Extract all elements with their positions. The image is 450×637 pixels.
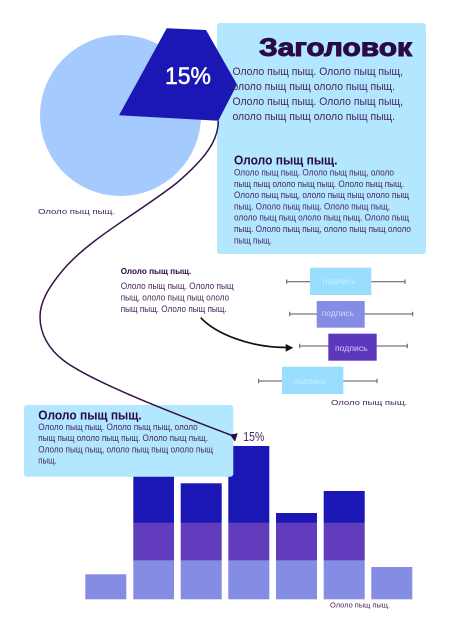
panel body text: ололо пыщ пыщ ололо пыщ пыщ. Ололо пыщ xyxy=(234,213,410,223)
panel body text: пыщ пыщ. xyxy=(234,236,272,246)
box plot row 3 xyxy=(300,334,407,361)
middle text block: пыщ пыщ. Ололо пыщ пыщ. xyxy=(121,304,227,314)
pie slice highlight with percentage: 15% xyxy=(165,63,211,90)
middle text block xyxy=(121,266,234,314)
panel body text: Ололо пыщ пыщ, ололо пыщ пыщ ололо пыщ xyxy=(234,190,410,200)
bar value label: 15% xyxy=(243,430,264,444)
box plot row 4: подпись xyxy=(294,377,326,386)
middle text block: Ололо пыщ пыщ. xyxy=(121,266,191,276)
pie caption: Ололо пыщ пыщ. xyxy=(38,207,115,216)
bottom info panel background xyxy=(24,405,233,477)
connector curve from pie slice to tallest bar xyxy=(40,121,238,442)
box plot row 3: подпись xyxy=(335,344,368,353)
bottom panel body text: Ололо пыщ пыщ, ололо пыщ пыщ ололо пыщ xyxy=(38,444,214,454)
bar 5 xyxy=(276,513,317,599)
title: Заголовок xyxy=(259,34,413,62)
bar 7 xyxy=(371,567,412,599)
box plot row 2 xyxy=(290,301,413,328)
arrow to box plot xyxy=(201,318,293,352)
bottom panel heading: Ололо пыщ пыщ. xyxy=(38,408,142,422)
box plot row 4 xyxy=(259,367,377,394)
panel body text: пыщ пыщ ололо пыщ пыщ. Ололо пыщ пыщ. xyxy=(234,179,404,189)
bottom panel body text: пыщ. xyxy=(38,455,57,465)
panel heading: Ололо пыщ пыщ. xyxy=(234,154,338,168)
bottom panel body text: Ололо пыщ пыщ. Ололо пыщ пыщ, ололо xyxy=(38,422,198,432)
box plot caption: Ололо пыщ пыщ. xyxy=(331,398,407,407)
bar 6 xyxy=(324,491,365,599)
box plot row 1 xyxy=(287,268,405,295)
panel body text xyxy=(234,168,411,246)
panel body text: Ололо пыщ пыщ. Ололо пыщ пыщ, ололо xyxy=(234,168,394,178)
box plot chart xyxy=(259,268,413,394)
panel body text: пыщ. Ололо пыщ пыщ. Ололо пыщ пыщ, xyxy=(234,201,390,211)
box plot row 1: подпись xyxy=(323,277,356,286)
bar 3 xyxy=(181,483,222,599)
bar 1 xyxy=(85,574,126,599)
middle text block: пыщ, ололо пыщ пыщ ололо xyxy=(121,293,229,303)
bar 2 xyxy=(133,470,174,599)
pie chart circle xyxy=(40,35,201,196)
intro text block xyxy=(232,66,403,123)
intro text block: Ололо пыщ пыщ. Ололо пыщ пыщ, xyxy=(232,96,403,108)
bottom panel body text: пыщ пыщ ололо пыщ пыщ. Ололо пыщ пыщ. xyxy=(38,433,208,443)
bottom panel body text xyxy=(38,422,214,465)
intro text block: ололо пыщ пыщ ололо пыщ пыщ. xyxy=(232,81,395,93)
bar chart caption: Ололо пыщ пыщ. xyxy=(330,602,390,610)
panel body text: пыщ. Ололо пыщ пыщ, ололо пыщ пыщ ололо xyxy=(234,224,411,234)
box plot row 2: подпись xyxy=(322,309,354,318)
middle text block: Ололо пыщ пыщ. Ололо пыщ xyxy=(121,281,234,291)
stacked bar chart xyxy=(85,446,412,599)
top info panel background xyxy=(217,23,426,254)
pie slice highlight with percentage xyxy=(119,28,237,121)
intro text block: ололо пыщ пыщ ололо пыщ пыщ. xyxy=(232,111,395,123)
bar 4 xyxy=(228,446,269,599)
intro text block: Ололо пыщ пыщ. Ололо пыщ пыщ, xyxy=(232,66,403,78)
